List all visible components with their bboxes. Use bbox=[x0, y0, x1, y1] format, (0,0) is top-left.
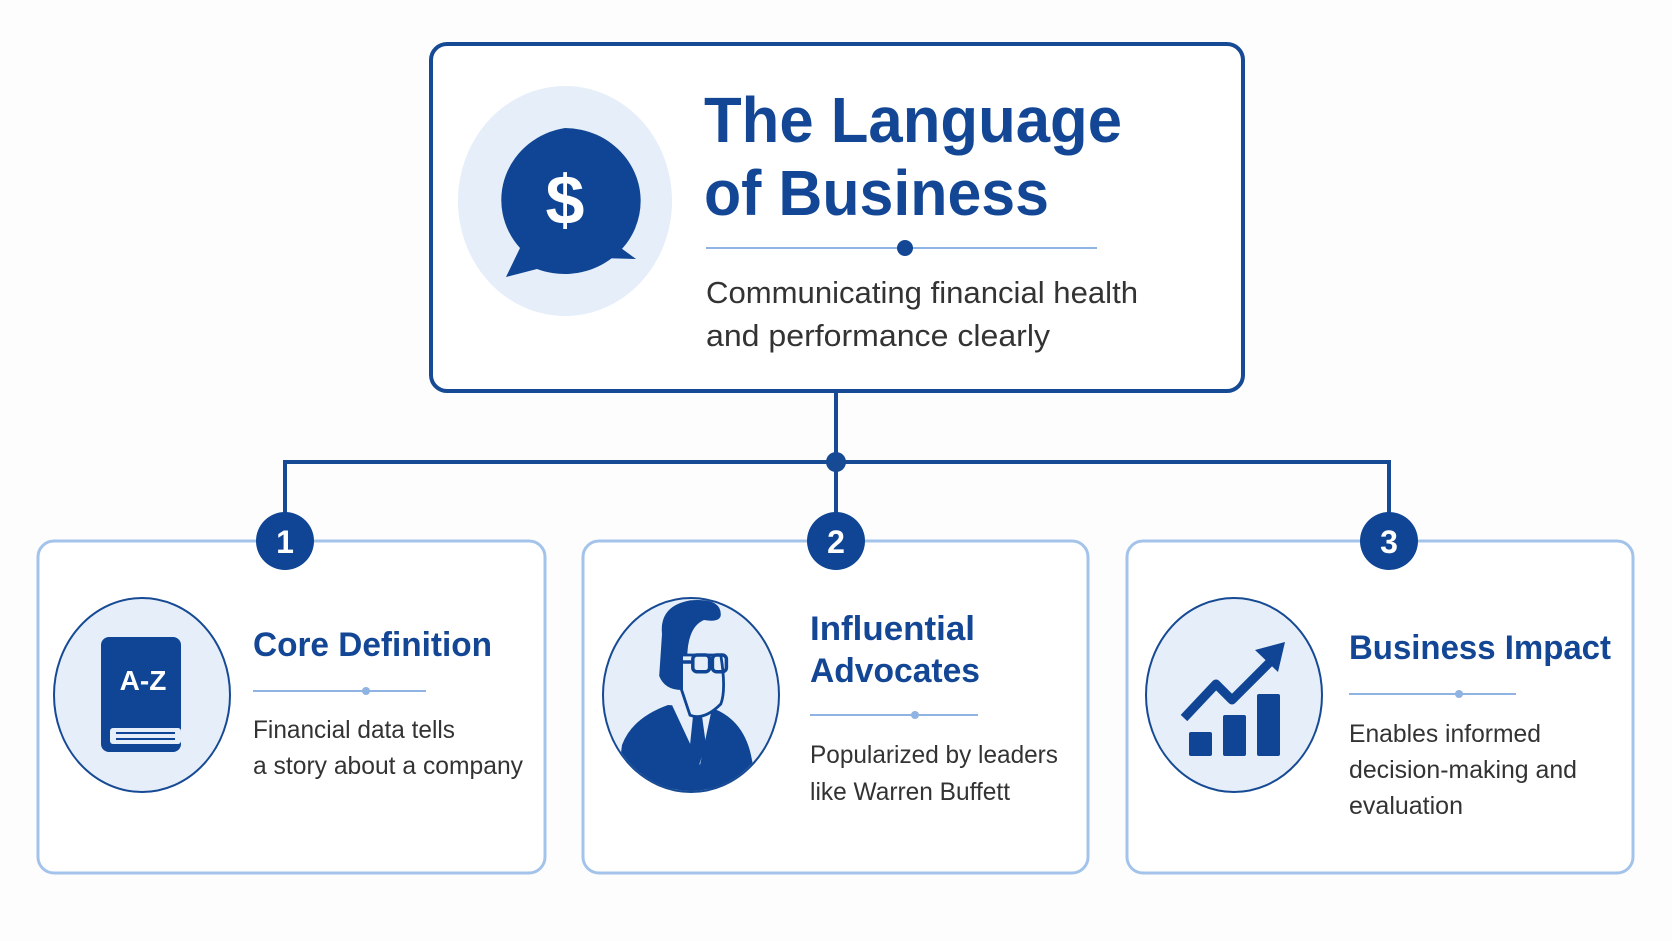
header panel: and performance clearly bbox=[706, 318, 1051, 353]
icon: person bbox=[603, 598, 779, 800]
icon: book A-Z: A-Z bbox=[120, 665, 166, 696]
heading: Advocates bbox=[810, 652, 980, 690]
header panel: of Business bbox=[704, 157, 1049, 229]
heading: Core Definition bbox=[253, 626, 492, 664]
divider bbox=[253, 687, 426, 695]
icon: dollar speech bubble bbox=[458, 86, 672, 316]
connector lines bbox=[285, 391, 1389, 541]
text: a story about a company bbox=[253, 752, 523, 780]
text: Popularized by leaders bbox=[810, 741, 1058, 769]
divider bbox=[1349, 690, 1516, 698]
connector hub dot bbox=[826, 452, 846, 472]
text: like Warren Buffett bbox=[810, 778, 1010, 806]
subtitle: Communicating financial health bbox=[706, 275, 1138, 310]
heading: Business Impact bbox=[1349, 629, 1611, 667]
panel: card 2 influential advocates bbox=[583, 512, 1088, 873]
icon: dollar speech bubble: $ bbox=[546, 161, 584, 239]
badge 2 bbox=[807, 512, 865, 570]
title: The Language bbox=[704, 84, 1122, 156]
text: decision-making and bbox=[1349, 756, 1577, 784]
panel: card 3 business impact bbox=[1127, 512, 1633, 873]
text: evaluation bbox=[1349, 792, 1463, 820]
text: Financial data tells bbox=[253, 716, 455, 744]
badge 3: 3 bbox=[1380, 524, 1398, 560]
badge 1: 1 bbox=[276, 524, 294, 560]
badge 3 bbox=[1360, 512, 1418, 570]
text: Enables informed bbox=[1349, 720, 1541, 748]
divider bbox=[706, 240, 1097, 256]
panel: card 1 core definition bbox=[38, 512, 545, 873]
header panel bbox=[431, 44, 1243, 391]
divider bbox=[810, 711, 978, 719]
badge 1 bbox=[256, 512, 314, 570]
badge 2: 2 bbox=[827, 524, 845, 560]
icon: book A-Z bbox=[54, 598, 230, 792]
icon: growth chart bbox=[1146, 598, 1322, 792]
heading: Influential bbox=[810, 610, 975, 648]
